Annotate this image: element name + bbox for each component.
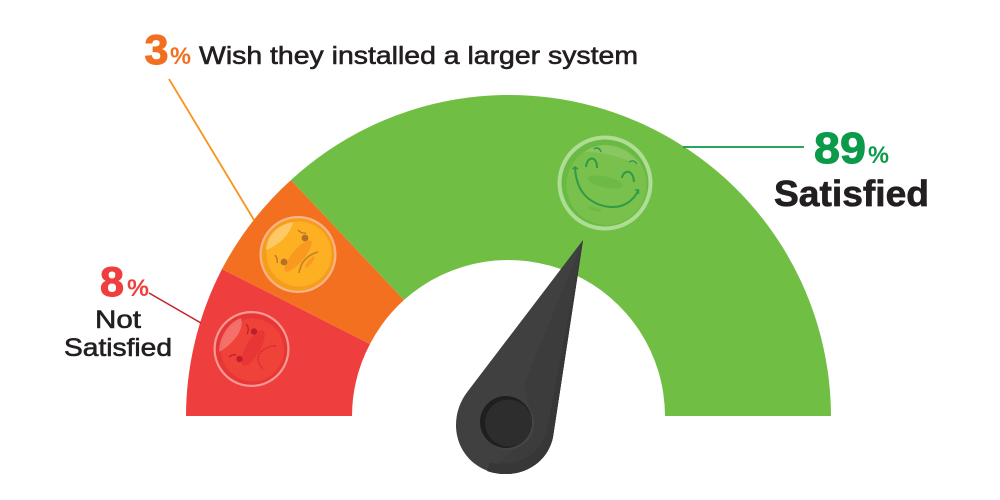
label: 89 percent satisfied: Satisfied bbox=[774, 173, 929, 214]
label: 3 percent wish they installed a larger system: 3 bbox=[144, 26, 168, 73]
gauge: wish larger segment bbox=[222, 180, 404, 344]
icon: happy green face bbox=[558, 136, 652, 230]
icon: unhappy orange face bbox=[260, 216, 336, 293]
leader line: orange bbox=[169, 79, 254, 220]
label: 3 percent wish they installed a larger system: Wish they installed a larger system bbox=[199, 42, 638, 70]
label: 3 percent wish they installed a larger system: % bbox=[170, 43, 191, 70]
label: 8 percent not satisfied: Not bbox=[95, 306, 141, 334]
label: 8 percent not satisfied: Satisfied bbox=[64, 334, 172, 362]
needle hub bbox=[481, 396, 534, 450]
label: 8 percent not satisfied bbox=[64, 258, 172, 362]
leader line: red bbox=[149, 293, 201, 323]
label: 8 percent not satisfied: 8 bbox=[100, 258, 124, 305]
icon: angry red face bbox=[214, 311, 290, 387]
label: 89 percent satisfied: 89 bbox=[814, 124, 866, 173]
leader line: green bbox=[683, 146, 804, 148]
label: 89 percent satisfied bbox=[774, 124, 929, 214]
label: 3 percent wish they installed a larger system bbox=[144, 26, 638, 73]
label: 8 percent not satisfied: % bbox=[127, 275, 149, 302]
label: 89 percent satisfied: % bbox=[868, 142, 889, 169]
gauge: satisfied segment bbox=[291, 95, 831, 416]
gauge: not satisfied segment bbox=[186, 269, 370, 416]
gauge needle bbox=[456, 240, 583, 474]
